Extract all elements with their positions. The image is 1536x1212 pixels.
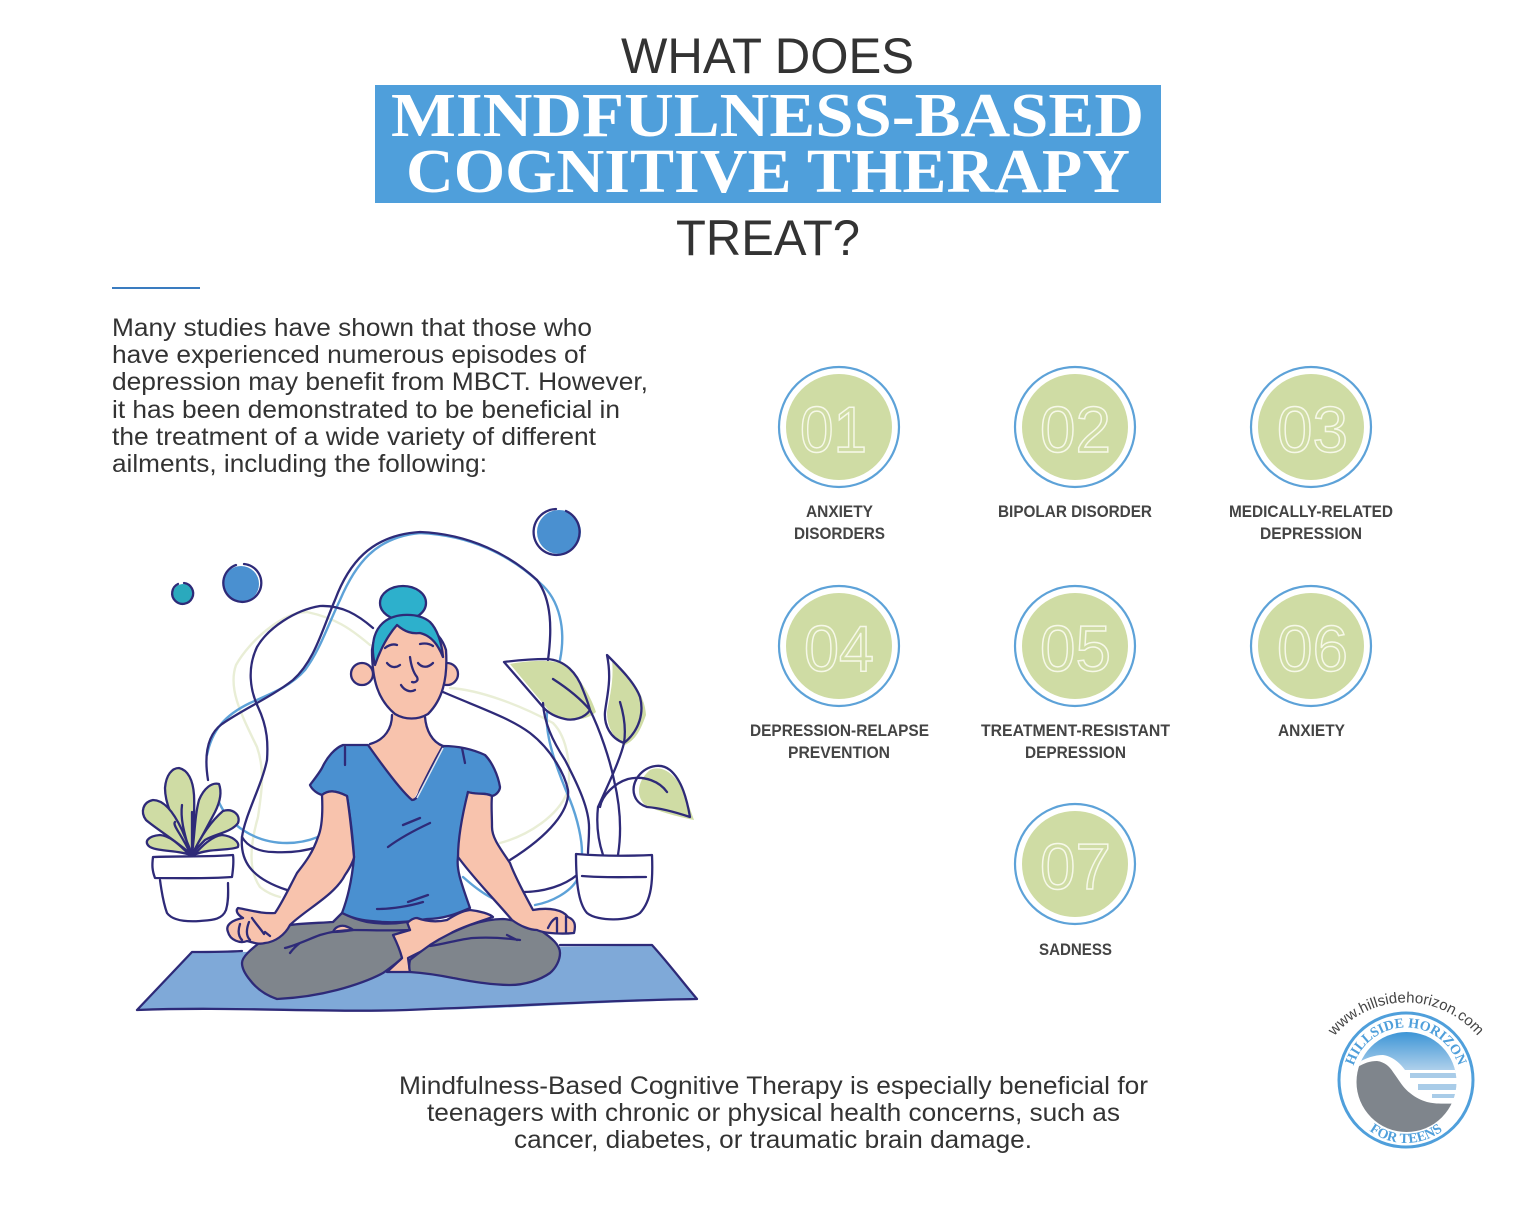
left leg [242, 913, 410, 999]
item 07: sadness [1015, 804, 1135, 959]
background flowing lines [206, 532, 582, 905]
right arm [458, 792, 575, 934]
item 01: anxiety disorders: ANXIETY [806, 502, 874, 521]
plant: right potted vine [504, 655, 694, 919]
item 06: anxiety [1251, 586, 1371, 740]
intro text: Many studies have shown that those who [112, 314, 592, 342]
intro text: the treatment of a wide variety of different [112, 423, 596, 451]
hair [373, 615, 443, 665]
intro text: it has been demonstrated to be beneficial in [112, 396, 620, 424]
title banner: MINDFULNESS-BASED [391, 82, 1144, 150]
plant: left potted plant [143, 768, 239, 921]
finger details [239, 916, 566, 940]
item 04: depression-relapse prevention [750, 586, 929, 762]
ears [351, 663, 458, 685]
item 06: anxiety: ANXIETY [1278, 721, 1346, 740]
icon: floating bubbles [172, 509, 581, 604]
leg fold lines [285, 930, 520, 953]
right leg [409, 919, 560, 985]
logo: Hillside Horizon for Teens: www.hillsidehorizon.com [1328, 992, 1482, 1036]
item 04: depression-relapse prevention: DEPRESSION-RELAPSE [750, 721, 929, 740]
numbered conditions [750, 367, 1393, 959]
item 01: anxiety disorders: DISORDERS [794, 524, 885, 543]
shirt fold lines [345, 747, 465, 909]
closing text [399, 1072, 1148, 1154]
closing text: teenagers with chronic or physical health concerns, such as [427, 1099, 1120, 1127]
title banner [375, 82, 1161, 206]
item 04: depression-relapse prevention: PREVENTION [788, 743, 890, 762]
intro text: ailments, including the following: [112, 450, 487, 478]
item 03: medically-related depression [1229, 367, 1393, 543]
crossed foot [387, 910, 493, 972]
intro text: have experienced numerous episodes of [112, 341, 586, 369]
logo: Hillside Horizon for Teens: HILLSIDE HORIZON [1345, 1018, 1467, 1066]
logo: Hillside Horizon for Teens: FOR TEENS [1370, 1123, 1442, 1143]
title: WHAT DOES [621, 28, 914, 84]
item 01: anxiety disorders: 01 [800, 393, 867, 466]
item 02: bipolar disorder: BIPOLAR DISORDER [998, 502, 1152, 521]
shirt [310, 745, 500, 922]
closing text: cancer, diabetes, or traumatic brain damage. [514, 1126, 1032, 1154]
face [372, 620, 446, 718]
intro text: depression may benefit from MBCT. However, [112, 368, 648, 396]
item 03: medically-related depression: 03 [1277, 393, 1348, 466]
facial features [385, 644, 433, 691]
title: TREAT? [676, 210, 860, 266]
item 01: anxiety disorders [779, 367, 899, 543]
skin patch on knee [333, 926, 353, 932]
item 06: anxiety: 06 [1277, 612, 1348, 685]
item 05: treatment-resistant depression [981, 586, 1171, 762]
left arm [227, 791, 354, 944]
item 04: depression-relapse prevention: 04 [804, 612, 874, 685]
item 02: bipolar disorder [998, 367, 1152, 521]
item 07: sadness: SADNESS [1039, 940, 1112, 959]
item 07: sadness: 07 [1040, 830, 1111, 903]
closing text: Mindfulness-Based Cognitive Therapy is especially beneficial for [399, 1072, 1148, 1100]
illustration: meditating woman [137, 509, 697, 1011]
title banner: COGNITIVE THERAPY [406, 138, 1130, 206]
intro text [112, 314, 648, 478]
logo: Hillside Horizon for Teens [1328, 992, 1482, 1148]
title [375, 28, 1161, 266]
yoga mat [137, 945, 697, 1011]
item 02: bipolar disorder: 02 [1040, 393, 1111, 466]
item 05: treatment-resistant depression: TREATMENT-RESISTANT [981, 721, 1171, 740]
item 03: medically-related depression: DEPRESSION [1260, 524, 1362, 543]
neck and chest [368, 710, 445, 802]
item 05: treatment-resistant depression: DEPRESSION [1025, 743, 1126, 762]
person [227, 586, 575, 999]
item 03: medically-related depression: MEDICALLY-RELATED [1229, 502, 1393, 521]
item 05: treatment-resistant depression: 05 [1040, 612, 1111, 685]
hair bun [380, 586, 426, 620]
